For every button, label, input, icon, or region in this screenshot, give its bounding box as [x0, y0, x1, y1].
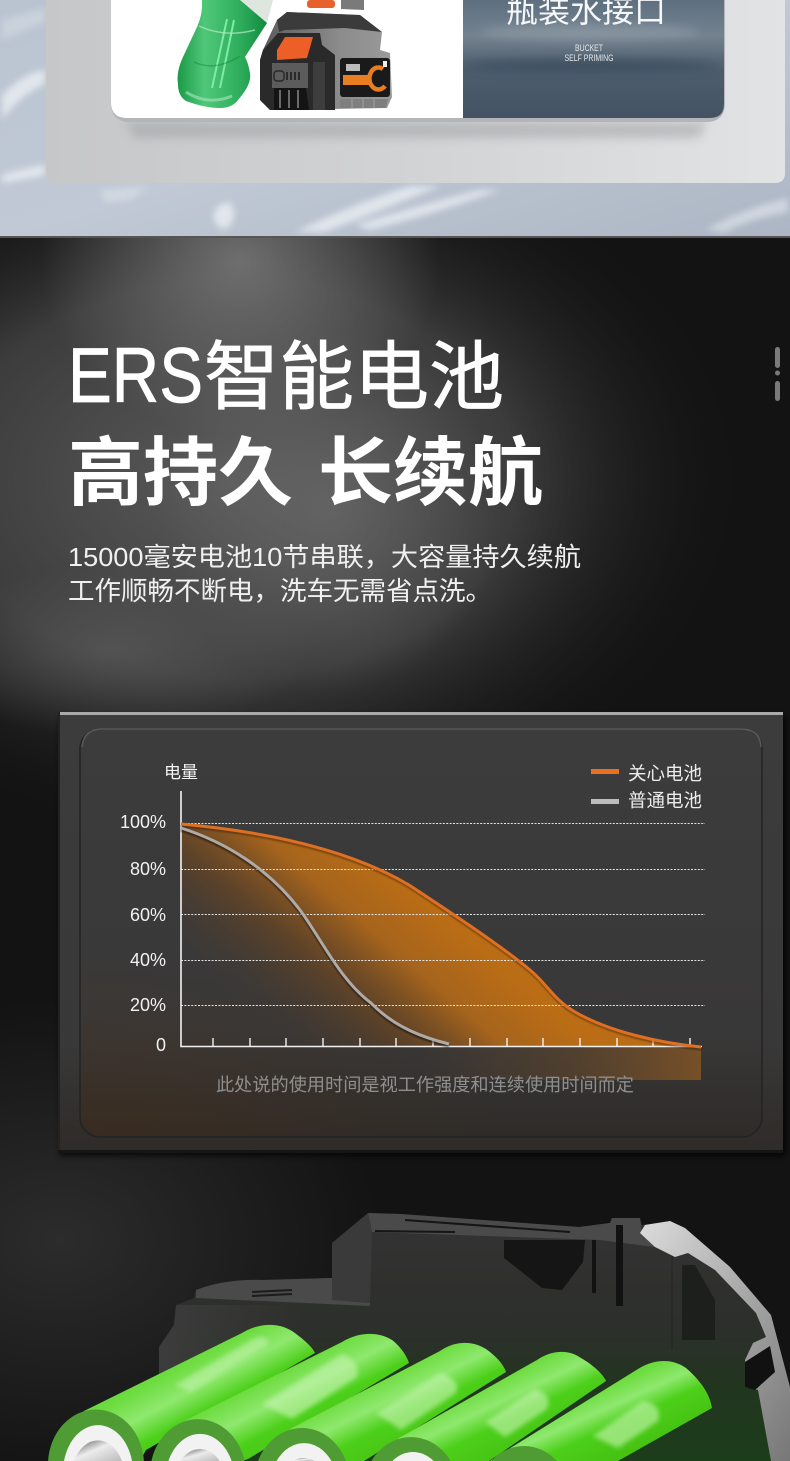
- text block: battery description: [68, 542, 581, 606]
- label: bucket self priming: [564, 44, 613, 61]
- title: ERS smart battery: 智能电池: [204, 335, 504, 419]
- panel: grey backing card: [46, 0, 785, 183]
- feature card: bottled water connector: [111, 0, 725, 122]
- grey battery curve: [181, 828, 449, 1046]
- heading: long lasting, long runtime: [68, 431, 543, 515]
- battery cell 3: [258, 1343, 506, 1461]
- title: ERS smart battery: [68, 331, 504, 419]
- y axis labels: 80%: [130, 859, 166, 879]
- battery cell 4: [371, 1352, 606, 1461]
- icon: side pill indicators: [775, 347, 780, 401]
- label: bucket self priming: BUCKET: [575, 43, 603, 53]
- y axis labels: 20%: [130, 995, 166, 1015]
- legend: 普通电池: [628, 790, 702, 811]
- caption panel: blue side: [460, 0, 724, 118]
- product panel: white side: [111, 0, 463, 118]
- battery casing: [159, 1213, 790, 1461]
- top section: silver water background: [0, 0, 790, 236]
- battery pack illustration: [48, 1213, 790, 1461]
- inner chart frame: [80, 729, 762, 1137]
- axes: [181, 791, 702, 1046]
- area under orange curve: [181, 824, 701, 1080]
- icon: orange and grey battery tool: [260, 0, 392, 110]
- y axis labels: 100%: [120, 812, 166, 832]
- legend: 关心电池: [628, 763, 702, 784]
- y axis labels: 60%: [130, 905, 166, 925]
- heading: long lasting, long runtime: 高持久: [68, 431, 293, 515]
- title: ERS smart battery: ERS: [68, 331, 203, 419]
- y axis labels: 0: [156, 1035, 166, 1055]
- text block: battery description: 工作顺畅不断电，洗车无需省点洗。: [68, 576, 492, 606]
- battery cell 1: [48, 1325, 315, 1461]
- y axis title: 电量: [164, 763, 198, 782]
- y axis labels: [120, 812, 166, 1055]
- heading: long lasting, long runtime: 长续航: [318, 431, 543, 515]
- chart footnote: 此处说的使用时间是视工作强度和连续使用时间而定: [216, 1075, 634, 1095]
- legend: [591, 763, 702, 811]
- chart: battery discharge curves: [120, 763, 705, 1095]
- text block: battery description: 15000毫安电池10节串联，大容量持久续航: [68, 542, 581, 572]
- orange battery curve: [181, 824, 701, 1049]
- icon: green water bottle: [178, 0, 273, 108]
- grid lines: [181, 824, 705, 1006]
- label: bucket self priming: SELF PRIMING: [564, 53, 614, 63]
- panel: chart container: [58, 712, 786, 1156]
- y axis labels: 40%: [130, 950, 166, 970]
- battery cell 2: [151, 1334, 409, 1461]
- battery cell 5: [490, 1361, 712, 1461]
